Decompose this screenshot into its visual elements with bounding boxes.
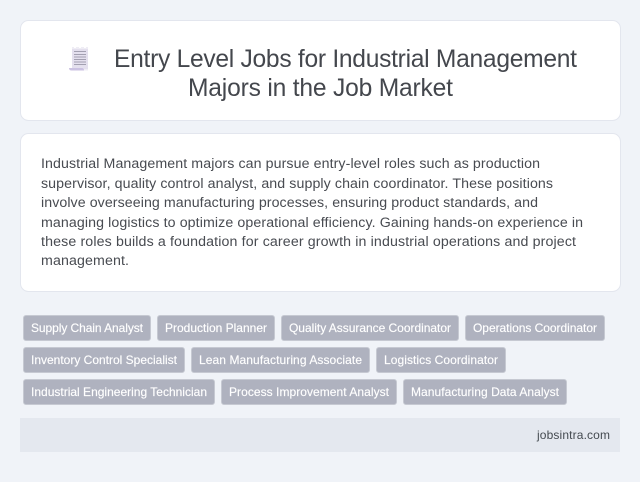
- tag: Logistics Coordinator: [376, 348, 506, 372]
- text block: description: managing logistics to optimize operational efficiency. Gaining hands-on experience in: [41, 215, 583, 231]
- tag: Production Planner: [158, 316, 274, 340]
- title: Majors in the Job Market: [188, 75, 453, 102]
- tag: Manufacturing Data Analyst: [404, 380, 566, 404]
- panel: title card: [20, 20, 620, 120]
- panel: description card: [20, 134, 620, 292]
- tag: Inventory Control Specialist: Inventory Control Specialist: [31, 353, 178, 367]
- tag: Manufacturing Data Analyst: Manufacturing Data Analyst: [411, 385, 560, 399]
- tag: Lean Manufacturing Associate: Lean Manufacturing Associate: [199, 353, 362, 367]
- tag: Supply Chain Analyst: Supply Chain Analyst: [31, 321, 144, 335]
- title: [114, 46, 577, 102]
- text block: description: supervisor, quality control analyst, and supply chain coordinator. These positions: [41, 176, 553, 192]
- tag: Operations Coordinator: [466, 316, 604, 340]
- footer bar: [20, 418, 620, 452]
- tag: Supply Chain Analyst: [24, 316, 150, 340]
- text block: description: Industrial Management majors can pursue entry-level roles such as production: [41, 156, 540, 172]
- tag: Industrial Engineering Technician: [24, 380, 214, 404]
- tag: Operations Coordinator: Operations Coordinator: [473, 321, 597, 335]
- tag: Quality Assurance Coordinator: [282, 316, 458, 340]
- icon: paper receipt scroll: [69, 47, 88, 70]
- tag: Industrial Engineering Technician: Industrial Engineering Technician: [31, 385, 207, 399]
- text block: description: these roles builds a foundation for career growth in industrial operations and project: [41, 234, 576, 250]
- tag: Lean Manufacturing Associate: [192, 348, 370, 372]
- panel: job tags: [24, 316, 604, 404]
- text block: description: management.: [41, 253, 129, 269]
- tag: Production Planner: Production Planner: [165, 321, 267, 335]
- tag: Inventory Control Specialist: [24, 348, 184, 372]
- tag: Logistics Coordinator: Logistics Coordinator: [384, 353, 498, 367]
- text block: description: involve overseeing manufacturing processes, ensuring product standards, and: [41, 195, 538, 211]
- footer text: site name: jobsintra.com: [536, 428, 610, 442]
- text block: description: [41, 156, 583, 269]
- tag: Quality Assurance Coordinator: Quality Assurance Coordinator: [289, 321, 451, 335]
- title: Entry Level Jobs for Industrial Management: [114, 46, 577, 73]
- tag: Process Improvement Analyst: [222, 380, 396, 404]
- tag: Process Improvement Analyst: Process Improvement Analyst: [229, 385, 390, 399]
